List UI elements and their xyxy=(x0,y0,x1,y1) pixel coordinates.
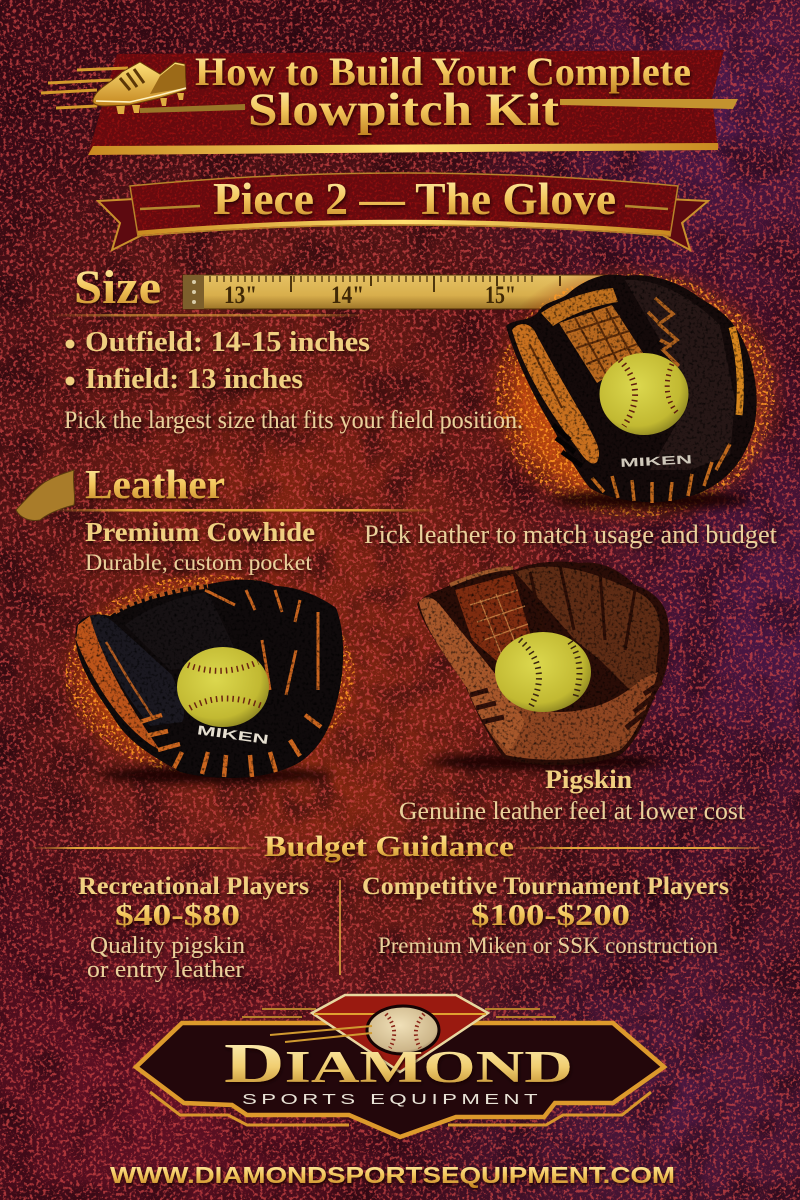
budget column: competitive tournament players: Premium Miken or SSK construction xyxy=(378,933,718,958)
icon: leather swatch xyxy=(16,470,75,521)
title banner xyxy=(41,49,738,155)
tape measure: 13" xyxy=(224,282,257,309)
glove photo: brown pigskin xyxy=(417,562,669,770)
softball xyxy=(177,647,269,727)
glove brand: MIKEN xyxy=(620,452,692,470)
glove photo: black cowhide Miken xyxy=(55,567,365,783)
icon: speeding golden cleat xyxy=(41,62,186,114)
budget column: recreational players: Recreational Players xyxy=(78,873,309,900)
section heading: Leather xyxy=(16,461,225,521)
icon: diamond with baseball xyxy=(270,995,488,1072)
section heading: Leather: Leather xyxy=(85,461,225,507)
bullet: infield: Infield: 13 inches xyxy=(85,364,303,395)
premium cowhide description: Premium Cowhide xyxy=(85,517,315,547)
pigskin description: Genuine leather feel at lower cost xyxy=(399,798,745,825)
premium cowhide description xyxy=(85,517,315,575)
tape measure: 14" xyxy=(331,282,364,309)
title text: How to Build Your Complete xyxy=(195,49,691,94)
premium cowhide description: Durable, custom pocket xyxy=(85,550,313,575)
size advice: Pick the largest size that fits your field position. xyxy=(64,407,523,434)
bullet: outfield: Outfield: 14-15 inches xyxy=(85,327,370,358)
tape measure: 15" xyxy=(485,282,516,309)
pigskin description: Pigskin xyxy=(545,765,633,794)
title text: Slowpitch Kit xyxy=(248,84,559,136)
section heading: Size: Size xyxy=(74,261,161,314)
softball xyxy=(495,632,591,712)
pigskin description xyxy=(399,765,745,825)
tape measure xyxy=(183,275,613,309)
Diamond Sports Equipment logo xyxy=(136,995,664,1137)
title text xyxy=(195,49,691,136)
subtitle text: Piece 2 — The Glove xyxy=(213,174,616,224)
budget column: recreational players xyxy=(78,873,309,983)
budget column: recreational players: or entry leather xyxy=(87,957,244,983)
softball xyxy=(600,353,688,435)
glove photo: orange and black Miken xyxy=(480,260,790,530)
budget column: competitive tournament players: $100-$200 xyxy=(471,897,630,932)
budget column: competitive tournament players: Competitive Tournament Players xyxy=(362,873,729,900)
subtitle ribbon banner xyxy=(98,173,708,250)
budget column: recreational players: Quality pigskin xyxy=(90,933,245,959)
size list xyxy=(66,327,370,395)
budget guidance heading: Budget Guidance xyxy=(264,830,514,863)
website url: WWW.DIAMONDSPORTSEQUIPMENT.COM xyxy=(110,1162,675,1188)
budget column: recreational players: $40-$80 xyxy=(115,897,240,932)
leather advice: Pick leather to match usage and budget xyxy=(364,520,778,549)
logo tagline: SPORTS EQUIPMENT xyxy=(242,1091,542,1108)
logo wordmark: D IAMOND xyxy=(224,1033,573,1095)
budget column: competitive tournament players xyxy=(362,873,729,958)
glove brand: MIKEN xyxy=(196,722,270,747)
